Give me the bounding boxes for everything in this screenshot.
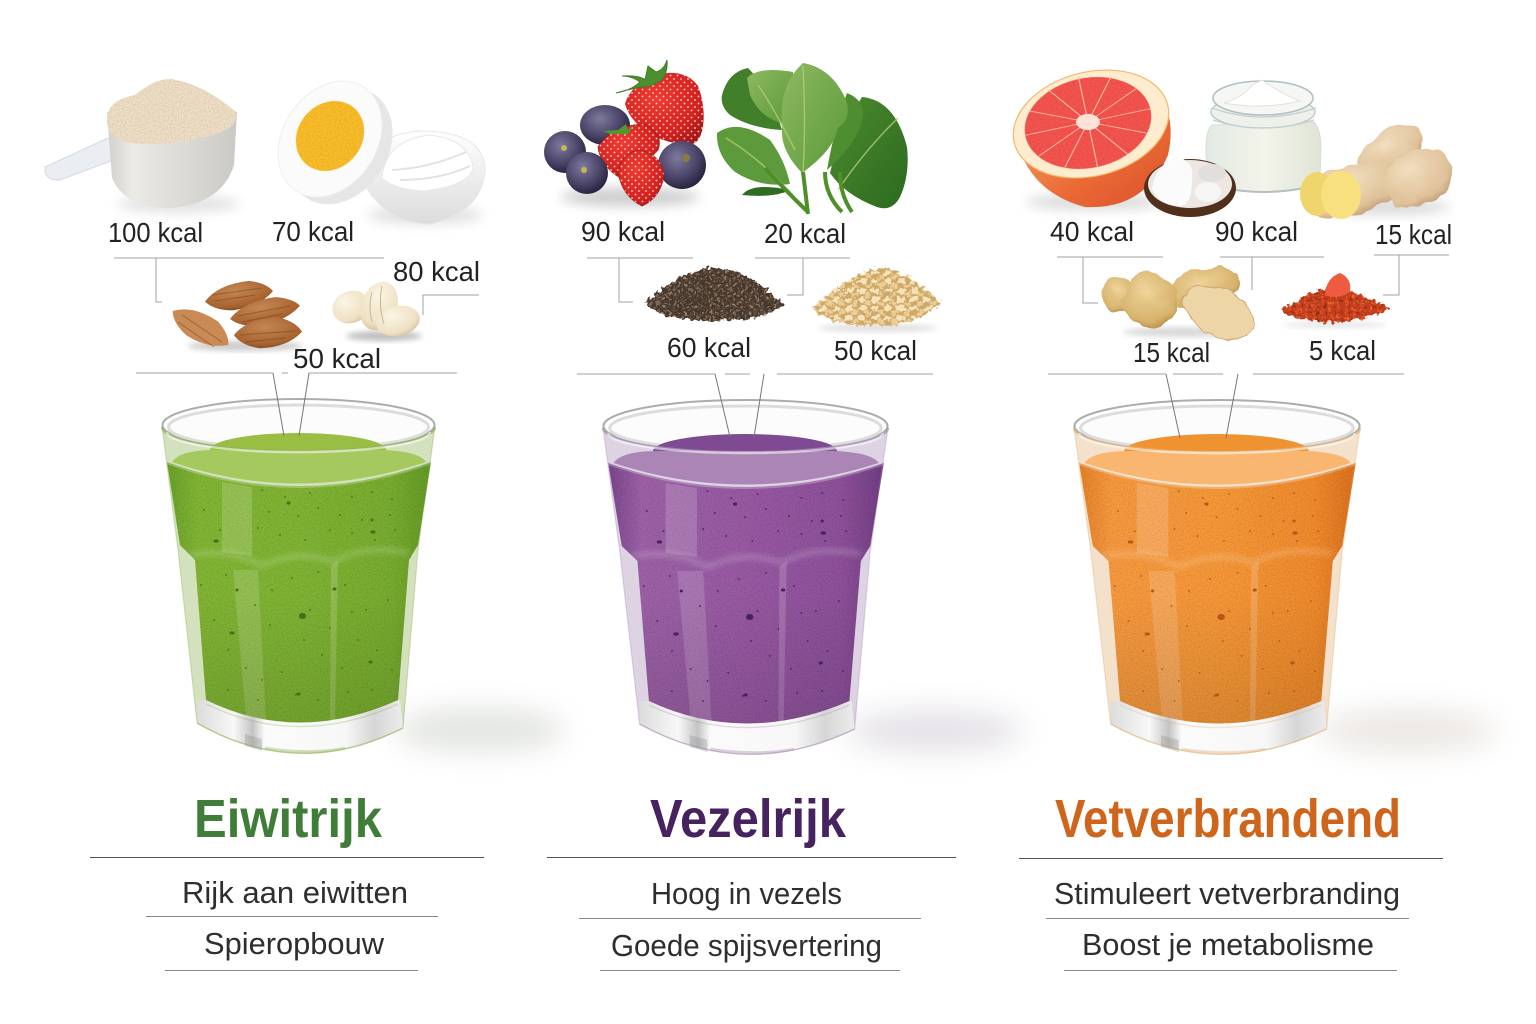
label: 15 kcal: 15 kcal [1375,219,1452,250]
glass: purple smoothie [603,400,1024,754]
label: 50 kcal: 50 kcal [834,335,917,366]
connector lines [114,258,479,436]
label: 40 kcal: 40 kcal [1050,216,1134,247]
icon: berries [544,60,706,206]
label: 90 kcal: 90 kcal [581,216,665,247]
icon: protein powder scoop [45,79,240,212]
panel: Vezelrijk [544,60,1024,970]
text: Hoog in vezels: Hoog in vezels [651,876,842,911]
icon: spinach [717,63,908,214]
icon: pale nuts [328,276,423,341]
icon: ginger roots [1103,259,1262,349]
text: Rijk aan eiwitten: Rijk aan eiwitten [182,875,408,910]
icon: boiled egg and yoghurt bowl [257,61,485,224]
label: 15 kcal: 15 kcal [1133,337,1210,368]
title: Eiwitrijk: Eiwitrijk [194,789,383,849]
title: Vetverbrandend: Vetverbrandend [1055,789,1401,849]
panel: Eiwitrijk [45,61,565,970]
label: 70 kcal: 70 kcal [272,216,354,247]
label: 100 kcal: 100 kcal [108,217,203,248]
glass: green smoothie [162,399,565,753]
icon: chia seeds pile [645,268,783,321]
icon: grapefruit [1002,54,1180,209]
icon: red spice pile [1280,273,1390,328]
label: 60 kcal: 60 kcal [667,332,751,363]
glass: orange smoothie [1074,400,1496,754]
icon: coconut bowl [1144,157,1236,217]
icon: ginger with cut [1297,116,1462,227]
text: Stimuleert vetverbranding: Stimuleert vetverbranding [1054,876,1400,911]
icon: almonds [166,278,303,357]
icon: coconut oil jar [1206,80,1321,192]
panel: Vetverbrandend [1002,54,1496,970]
label: 90 kcal: 90 kcal [1215,216,1298,247]
text: Spieropbouw: Spieropbouw [204,926,385,961]
label: 80 kcal: 80 kcal [393,256,480,287]
connector lines [1048,255,1449,438]
label: 20 kcal: 20 kcal [764,218,846,249]
title: Vezelrijk: Vezelrijk [650,789,847,849]
icon: oats pile [812,268,941,332]
text: Boost je metabolisme: Boost je metabolisme [1082,927,1374,962]
text: Goede spijsvertering: Goede spijsvertering [611,928,882,963]
label: 5 kcal: 5 kcal [1309,335,1376,366]
label: 50 kcal: 50 kcal [293,343,381,374]
connector lines [577,258,933,437]
